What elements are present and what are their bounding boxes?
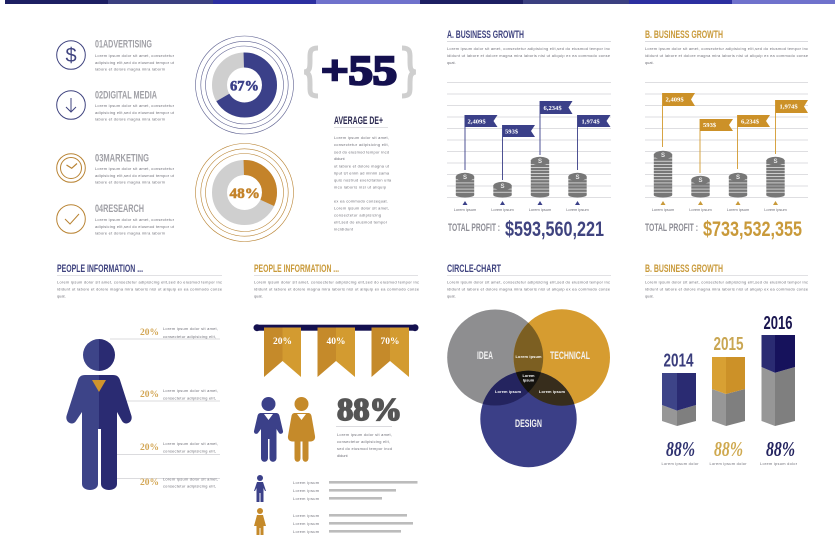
- column 2014: [662, 350, 699, 466]
- text: research description: [95, 217, 175, 236]
- bars: man rows: Lorem ipsum: [293, 488, 319, 493]
- venn diagram: TECHNICAL: [550, 350, 590, 362]
- coin flag chart: Lorem ipsum: [454, 207, 476, 212]
- column 2015: Lorem ipsum dolor: [710, 461, 747, 466]
- coin flag chart: 1,974$: [780, 104, 798, 110]
- stat: 20% row 4: consectetur adipisicing elit,: [163, 484, 216, 488]
- heading: 04 research: 04RESEARCH: [95, 203, 144, 215]
- text: marketing description: [95, 166, 175, 184]
- coin flag chart: Lorem ipsum: [529, 207, 551, 212]
- column 2015: 2015: [714, 334, 744, 354]
- column 2014: 2014: [664, 350, 694, 370]
- coin flag chart: S: [698, 178, 703, 184]
- text: average description: liput Ut enim ad minim sama: [334, 170, 390, 176]
- text: research description: labore et dolore magna mira laborm: [95, 230, 165, 236]
- heading: 03 marketing: 03MARKETING: [95, 152, 149, 164]
- icon: woman figure: [288, 397, 315, 462]
- coin flag chart: [447, 82, 611, 212]
- donut chart: 48%: [196, 144, 294, 242]
- panel: people information (gold): [254, 263, 419, 535]
- coin flag chart: Lorem ipsum: [727, 207, 749, 212]
- text: average description: Lorem ipsum dolor sit amet,: [334, 135, 389, 140]
- ribbons with percentages: 70%: [380, 337, 400, 347]
- text: description: [645, 46, 808, 65]
- text: marketing description: Lorem ipsum dolor sit amet, consectetur: [95, 166, 175, 171]
- text: digital media description: labore et dolore magna mira laborm: [95, 116, 165, 122]
- text: digital media description: Lorem ipsum dolor sit amet, consectetur: [95, 103, 175, 108]
- text: average description: incididunt: [334, 226, 354, 232]
- icon: dollar: [57, 41, 85, 69]
- text: description: quat.: [447, 60, 456, 65]
- icon: dollar: $: [65, 45, 77, 67]
- text: 88% description: Lorem ipsum dolor sit amet,: [337, 432, 392, 437]
- coin flag chart: 6,234$: [741, 118, 760, 126]
- coin flag chart: Lorem ipsum: [652, 207, 674, 212]
- coin flag chart: Lorem ipsum: [764, 207, 787, 212]
- text: description: quat.: [254, 294, 263, 298]
- coin flag chart: Lorem ipsum: [566, 207, 589, 212]
- coin flag chart: S: [500, 184, 505, 190]
- column 2016: 2016: [764, 313, 792, 333]
- column 2014: Lorem ipsum dolor: [662, 461, 699, 466]
- text: description: Lorem ipsum dolor sit amet, consectetur adipisicing elit,sed do eiusmod tempor inc: [57, 280, 222, 284]
- stat: 20% row 2: consectetur adipisicing elit,: [163, 396, 216, 400]
- text: advertising description: adipisicing elit,sed do eiusmod tempor ut: [95, 60, 175, 65]
- text: research description: Lorem ipsum dolor sit amet, consectetur: [95, 217, 175, 222]
- stat: 20% row 4: [140, 476, 218, 488]
- coin flag chart: 1,974$: [582, 118, 600, 126]
- coin flag chart: S: [736, 175, 740, 181]
- heading: 02 digital media: 02DIGITAL MEDIA: [95, 90, 157, 102]
- text: research description: adipisicing elit,sed do eiusmod tempor ut: [95, 224, 175, 229]
- venn diagram: DESIGN: [515, 418, 542, 430]
- text: description: quat.: [645, 294, 654, 298]
- column 2015: 88%: [714, 437, 743, 461]
- panel: A. business growth: [447, 29, 611, 241]
- icon: man figure: [254, 397, 283, 462]
- donut chart: 48%: 48%: [230, 186, 260, 202]
- bars: man rows: Lorem ipsum: [293, 496, 319, 501]
- text: description: quat.: [57, 294, 66, 298]
- coin flag chart: [645, 82, 808, 212]
- text: 88% description: didunt: [337, 453, 349, 458]
- total profit: [645, 218, 802, 241]
- heading: PEOPLE INFORMATION ...: [254, 263, 339, 275]
- text: description: [447, 280, 610, 298]
- text: description: Lorem ipsum dolor sit amet, consectetur adipisicing elit,sed do eiusmod tempor inc: [447, 46, 610, 51]
- bars: woman rows: Lorem ipsum: [293, 521, 319, 526]
- venn diagram: Ipsum: [523, 378, 535, 382]
- stat: 88%: 88%: [337, 391, 402, 427]
- column 2016: Lorem ipsum dolor: [760, 461, 798, 466]
- text: digital media description: adipisicing elit,sed do eiusmod tempor ut: [95, 110, 175, 115]
- text: average description: Lorem ipsum dolor sit amet,: [334, 206, 389, 210]
- text: description: Lorem ipsum dolor sit amet, consectetur adipisicing elit,sed do eiusmod tempor inc: [254, 280, 419, 284]
- text: average description: consectetur adipisicing elit,: [334, 142, 389, 147]
- stat: 20% row 4: Lorem ipsum dolor sit amet,: [163, 476, 218, 482]
- text: description: [254, 280, 419, 298]
- venn diagram: IDEA: [477, 350, 493, 362]
- coin flag chart: S: [773, 159, 778, 165]
- coin flag chart: S: [538, 159, 542, 165]
- venn diagram: Lorem ipsum: [495, 389, 522, 394]
- coin flag chart: Lorem ipsum: [491, 207, 514, 212]
- text: average description: elit,sed do eiusmod tempor: [334, 220, 388, 224]
- text: description: Lorem ipsum dolor sit amet, consectetur adipisicing elit,sed do eiusmod tempor inc: [645, 280, 808, 284]
- big number +55 with braces: +55: [321, 47, 397, 93]
- text: description: quat.: [645, 60, 654, 65]
- venn diagram: Lorem: [523, 373, 535, 378]
- text: marketing description: labore et dolore magna mira laborm: [95, 180, 165, 184]
- panel: four channels list: [57, 38, 175, 236]
- stat: 20% row 3: [140, 441, 218, 454]
- icon: small man: [254, 475, 266, 502]
- coin flag chart: S: [575, 175, 580, 181]
- stat: 20% row 3: consectetur adipisicing elit,: [163, 448, 216, 454]
- column 2014: 88%: [666, 437, 695, 461]
- stat: 20% row 1: consectetur adipisicing elit,: [163, 334, 216, 339]
- coin flag chart: S: [661, 153, 665, 159]
- big number +55 with braces: [304, 47, 416, 96]
- coin flag chart: 593$: [505, 128, 519, 136]
- column 2015: [710, 334, 747, 466]
- text: average description: ex ea commodo consequat.: [334, 198, 388, 204]
- text: description: Lorem ipsum dolor sit amet, consectetur adipisicing elit,sed do eiusmod tempor inc: [447, 280, 610, 284]
- bars: man rows: [293, 480, 418, 501]
- text: description: [645, 280, 808, 298]
- icon: large man figure: [66, 339, 132, 490]
- heading: average de+: AVERAGE DE+: [334, 115, 383, 127]
- stat: 20% row 2: Lorem ipsum dolor sit amet,: [163, 388, 218, 393]
- text: average description: quis nostrud exercitation ulla: [334, 178, 392, 182]
- text: 88% description: consectetur adipisicing elit,: [337, 439, 390, 444]
- total profit: [448, 218, 604, 241]
- coin flag chart: Lorem ipsum: [689, 207, 712, 212]
- text: description: ididunt ut labore et dolore magna mira laboris nisi ut aliquip ex ea commodo conse: [447, 53, 610, 58]
- donut chart: 67%: 67%: [230, 78, 259, 94]
- text: marketing description: adipisicing elit,sed do eiusmod tempor ut: [95, 173, 175, 178]
- coin flag chart: 2,409$: [666, 96, 684, 104]
- text: description: quat.: [447, 294, 456, 298]
- text: 88% description: sed do eiusmod tempor incd: [337, 446, 392, 451]
- total profit: TOTAL PROFIT :: [645, 222, 698, 234]
- heading: B. BUSINESS GROWTH: [645, 263, 723, 275]
- text: description: ididunt ut labore et dolore magna mira laboris nisi ut aliquip ex ea commodo conse: [645, 286, 808, 292]
- panel: B. business growth chart: [645, 29, 808, 241]
- icon: small woman: [254, 508, 266, 535]
- text: description: ididunt ut labore et dolore magna mira laboris nisi ut aliquip ex ea commodo conse: [254, 286, 419, 292]
- heading: 01 advertising: 01ADVERTISING: [95, 38, 152, 50]
- coin flag chart: S: [463, 175, 467, 181]
- stat: 20% row 1: [140, 326, 218, 339]
- stat: 20% row 2: [140, 388, 218, 400]
- text: 88% description: [337, 432, 392, 458]
- panel: business growth columns: [645, 263, 808, 466]
- text: average description: consectetur adipisicing: [334, 212, 381, 218]
- text: average description: mco laboris nisi ut aliquip: [334, 184, 386, 190]
- heading: CIRCLE-CHART: [447, 263, 501, 275]
- bars: woman rows: Lorem ipsum: [293, 529, 319, 534]
- icon: down arrow: [57, 91, 85, 119]
- bars: woman rows: Lorem ipsum: [293, 513, 319, 518]
- text: description: ididunt ut labore et dolore magna mira laboris nisi ut aliquip ex ea commodo conse: [447, 286, 610, 292]
- venn diagram: [447, 309, 610, 467]
- heading: A. BUSINESS GROWTH: [447, 29, 524, 41]
- total profit: $733,532,355: [703, 218, 802, 241]
- stat: 20% row 3: Lorem ipsum dolor sit amet,: [163, 441, 218, 446]
- text: average description: sed do eiusmod tempor incd: [334, 150, 389, 154]
- text: advertising description: [95, 53, 175, 72]
- text: average description: ut labore et dolore magna ut: [334, 164, 390, 168]
- text: description: [447, 46, 610, 65]
- text: digital media description: [95, 103, 175, 122]
- text: advertising description: labore et dolore magna mira laborm: [95, 66, 165, 72]
- panel: circle chart: [447, 263, 611, 467]
- text: description: Lorem ipsum dolor sit amet, consectetur adipisicing elit,sed do eiusmod tempor inc: [645, 46, 808, 51]
- stat: 20% row 2: 20%: [140, 390, 159, 400]
- bars: woman rows: [293, 513, 413, 534]
- icon: clock: [57, 154, 85, 182]
- ribbons with percentages: 40%: [326, 337, 346, 347]
- ribbons with percentages: 20%: [273, 337, 292, 347]
- stat: 20% row 1: 20%: [140, 328, 159, 338]
- panel: people information (blue): [57, 263, 222, 490]
- text: description: ididunt ut labore et dolore magna mira laboris nisi ut aliquip ex ea commodo conse: [57, 286, 222, 292]
- heading: PEOPLE INFORMATION ...: [57, 263, 143, 275]
- top colour bar: [5, 0, 835, 4]
- coin flag chart: 6,234$: [544, 105, 562, 112]
- venn diagram: Lorem ipsum: [516, 354, 542, 359]
- text: description: ididunt ut labore et dolore magna mira laboris nisi ut aliquip ex ea commodo conse: [645, 53, 808, 58]
- text: advertising description: Lorem ipsum dolor sit amet, consectetur: [95, 53, 175, 58]
- leader lines: [110, 339, 220, 478]
- stat: 20% row 4: 20%: [140, 478, 159, 488]
- text: description: [57, 280, 222, 298]
- text: average description: didunt: [334, 156, 346, 161]
- total profit: TOTAL PROFIT :: [448, 222, 500, 234]
- coin flag chart: 593$: [703, 122, 717, 129]
- column 2016: [760, 313, 798, 466]
- icon: check mark: [57, 205, 85, 233]
- column 2016: 88%: [766, 437, 795, 461]
- stat: 20% row 3: 20%: [140, 443, 159, 453]
- panel: average de+: [334, 115, 392, 232]
- stat: 20% row 1: Lorem ipsum dolor sit amet,: [163, 326, 218, 331]
- donut chart: 67%: [196, 36, 294, 134]
- coin flag chart: 2,409$: [468, 118, 486, 126]
- total profit: $593,560,221: [505, 218, 604, 241]
- venn diagram: Lorem ipsum: [539, 389, 566, 394]
- heading: B. BUSINESS GROWTH: [645, 29, 723, 41]
- bars: man rows: Lorem ipsum: [293, 480, 319, 485]
- text: average description: [334, 135, 392, 232]
- ribbons with percentages: [254, 324, 418, 377]
